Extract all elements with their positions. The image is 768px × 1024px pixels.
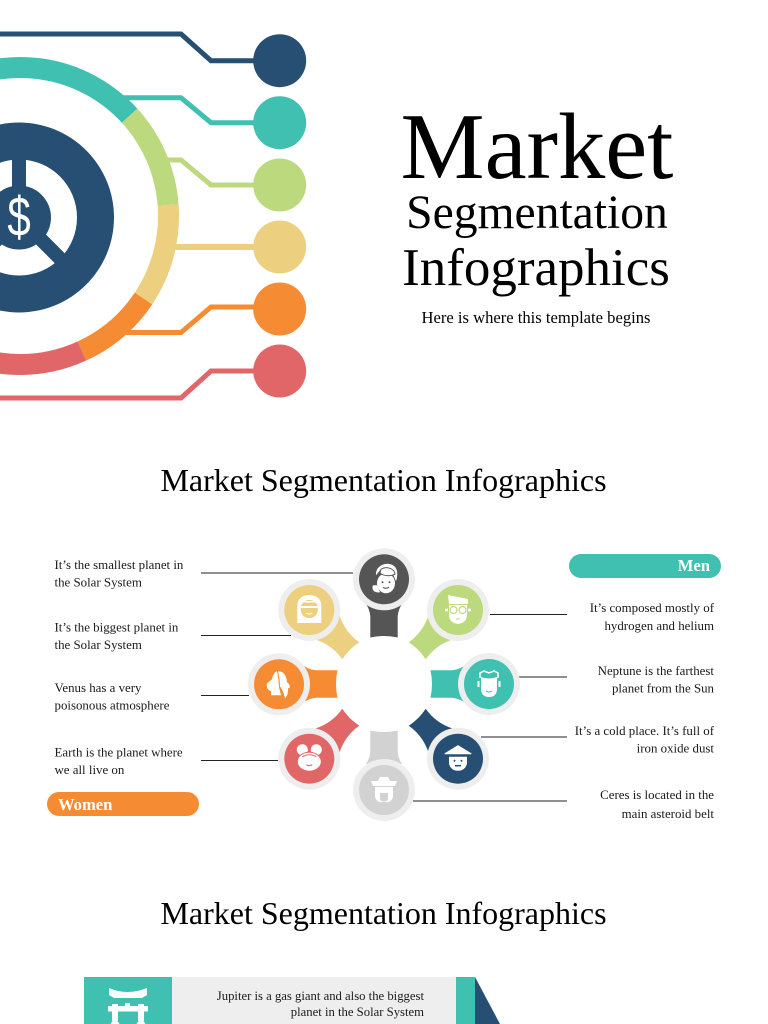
- pill: women: Women: [58, 795, 112, 814]
- title: Segmentation: [406, 187, 668, 239]
- title: Market: [401, 95, 673, 199]
- icon: woman with hair buns: [278, 728, 340, 790]
- panel: jupiter row: [84, 977, 500, 1024]
- petals: [304, 604, 464, 764]
- text: right column: Ceres is located in the: [600, 788, 714, 802]
- text: left column: [54, 558, 184, 777]
- text: left column: Venus has a very: [54, 681, 142, 695]
- icon: dollar hub: $: [7, 186, 31, 248]
- heading: section two: Market Segmentation Infographics: [160, 462, 607, 498]
- text: left column: we all live on: [54, 763, 125, 777]
- pill: women: [47, 792, 199, 816]
- text: left column: the Solar System: [54, 576, 142, 590]
- heading: section three: Market Segmentation Infographics: [160, 895, 607, 931]
- connector: red: [0, 344, 306, 398]
- pill: men: [569, 554, 721, 578]
- text: jupiter description: Jupiter is a gas giant and also the biggest: [217, 989, 424, 1003]
- text: jupiter description: [217, 989, 424, 1019]
- icon: man with sombrero: [353, 759, 415, 821]
- text: right column: planet from the Sun: [612, 682, 715, 696]
- petal: left: [304, 666, 338, 702]
- title: [401, 95, 673, 297]
- text: left column: Earth is the planet where: [54, 746, 183, 760]
- petal: bottom right: [405, 705, 453, 753]
- title: Infographics: [402, 239, 670, 297]
- pill: men: Men: [678, 556, 710, 575]
- text: right column: Neptune is the farthest: [598, 664, 714, 678]
- text: left column: the Solar System: [54, 638, 142, 652]
- petal: top: [366, 604, 402, 638]
- petal: bottom left: [315, 705, 363, 753]
- icon: man with conical hat: [427, 728, 489, 790]
- text: left column: poisonous atmosphere: [54, 698, 170, 712]
- icon: dollar hub: [0, 122, 114, 312]
- petal: top left: [315, 615, 363, 663]
- icon: woman with veil: [278, 579, 340, 641]
- connector: yellow: [170, 220, 306, 274]
- segmented ring: [0, 67, 169, 364]
- text: right column: hydrogen and helium: [604, 619, 714, 633]
- icon: woman with headset: [353, 548, 415, 610]
- petal: bottom: [366, 730, 402, 764]
- connector: green: [155, 158, 306, 212]
- text: right column: It’s composed mostly of: [590, 601, 715, 615]
- connector: teal: [115, 96, 306, 149]
- text: right column: It’s a cold place. It’s full of: [575, 724, 715, 738]
- petal: top right: [405, 615, 453, 663]
- connector lines and nodes: [0, 34, 306, 398]
- text: left column: It’s the smallest planet in: [54, 558, 184, 572]
- text: jupiter description: planet in the Solar System: [291, 1005, 424, 1019]
- text: right column: iron oxide dust: [637, 742, 714, 756]
- icon: man with glasses: [427, 579, 489, 641]
- text: right column: [575, 601, 715, 821]
- connector: navy: [0, 34, 306, 87]
- text: left column: It’s the biggest planet in: [54, 620, 179, 634]
- leader lines: [201, 573, 567, 801]
- petal: right: [430, 666, 464, 702]
- connector: orange: [115, 282, 306, 336]
- subtitle: Here is where this template begins: [421, 308, 651, 327]
- text: right column: main asteroid belt: [622, 807, 714, 821]
- icon: torii gate: [108, 988, 148, 1024]
- icon: woman in profile: [248, 653, 310, 715]
- icon: man with short hair: [458, 653, 520, 715]
